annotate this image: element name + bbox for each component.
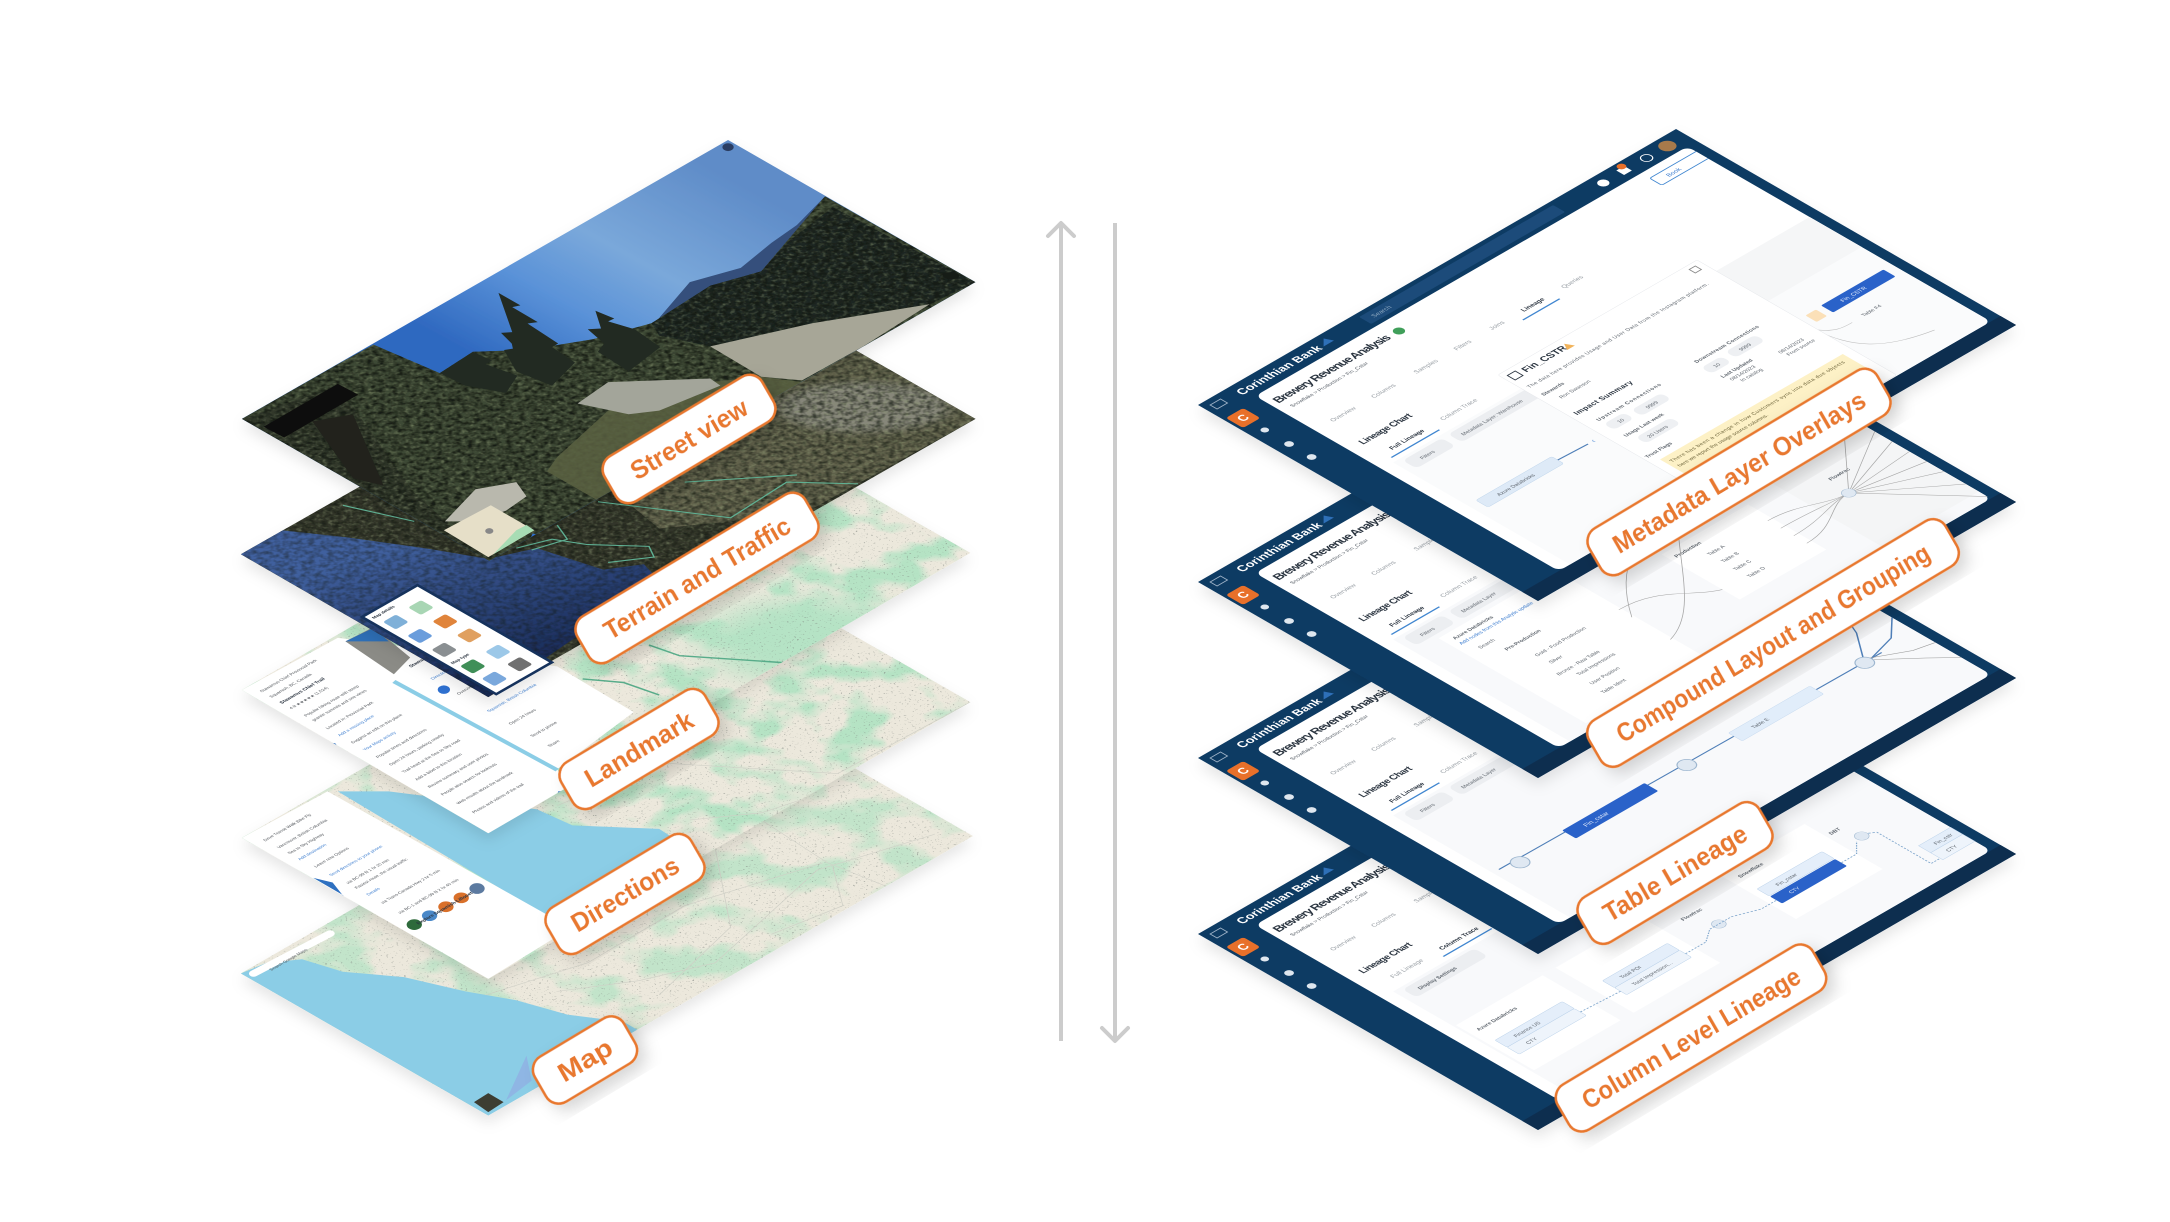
metadata popup card: There has been a change in how Customers sync into data due objects [1669, 360, 1847, 463]
landmark panel text: Send to phone [529, 721, 559, 738]
right stack: lineage layers [1198, 129, 2016, 1130]
layer: column level lineage: Display Settings [1417, 966, 1459, 991]
landmark panel text: People also search for lookouts [439, 762, 499, 796]
layer: map [241, 768, 973, 1123]
landmark panel text: Review summary and user photos [426, 752, 490, 789]
landmark panel text: Squamish, BC, Canada [268, 672, 313, 698]
directions panel text: via BC-1 and BC-99 N 2 hr 40 min [397, 878, 460, 914]
layer: compound layout and grouping: Gold - Food Production [1534, 626, 1588, 658]
layer: column level lineage: Fin_cstar [1775, 873, 1800, 887]
map layers card: Map type [449, 652, 471, 665]
metadata popup card: 08/14/2023 [1777, 338, 1806, 355]
layer: table lineage: Columns [1370, 736, 1399, 752]
label: compound layout and grouping: Compound Layout and Grouping [1611, 537, 1935, 749]
layer: metadata layer overlays: Search [1370, 305, 1394, 319]
directions panel text: Sea to Sky Highway [286, 832, 326, 855]
layer: table lineage: C [1233, 765, 1253, 777]
layer: compound layout and grouping: Table D [1746, 566, 1768, 579]
layer: compound layout and grouping [1198, 421, 2016, 786]
metadata popup card: The data here provides Usage and User Data from the Instagram platform. [1526, 282, 1711, 389]
layer: metadata layer overlays: Corinthian Bank [1233, 343, 1326, 397]
directions panel text: Fastest route, the usual traffic [353, 857, 410, 890]
layer: metadata layer overlays: Snowflake > Production > Fin_Cstar [1289, 361, 1371, 408]
metadata popup card: Upstream Connections [1595, 383, 1663, 422]
layer: compound layout and grouping: User Position [1589, 666, 1622, 686]
layer: compound layout and grouping: Table C [1732, 559, 1754, 572]
metadata popup card [1498, 260, 1897, 490]
landmark panel text: Squamish, British Columbia [486, 683, 538, 713]
directions panel text: Add destination [297, 843, 328, 861]
label: terrain and traffic [570, 487, 824, 669]
layer: table lineage: Lineage Chart [1356, 765, 1416, 799]
landmark panel text: Open 24 hours, parking nearby [388, 733, 446, 766]
layer: compound layout and grouping: Corinthian Bank [1233, 520, 1326, 574]
layer: column level lineage: Azure Databricks [1475, 1007, 1520, 1032]
layer: compound layout and grouping: Table Ident [1600, 678, 1629, 695]
landmark panel text: Stawamus Chief [408, 646, 447, 669]
layer: metadata layer overlays: Samples [1412, 358, 1441, 375]
layer: compound layout and grouping: Full Lineage [1388, 605, 1427, 628]
directions panel text: Send directions to your phone [328, 844, 384, 877]
layer: table lineage: Corinthian Bank [1233, 696, 1326, 750]
landmark panel text: Open 24 hours [507, 708, 538, 725]
metadata popup card: Trust Flags [1644, 442, 1675, 459]
layer: street view [242, 140, 976, 563]
layer: column level lineage: CTY [1945, 844, 1960, 853]
arrow: upward [1048, 223, 1074, 1041]
metadata popup card: Usage Last week [1623, 412, 1667, 438]
layer: compound layout and grouping: Add nodes from this Analytic update [1458, 601, 1536, 646]
layer: compound layout and grouping: Column Trace [1439, 575, 1480, 599]
layer: metadata layer overlays: Fin_CSTR [1840, 286, 1870, 303]
landmark panel text: Overview Reviews About [455, 668, 503, 695]
metadata popup card: 20 Users [1646, 425, 1671, 439]
landmark panel text: Directions Save Nearby [429, 654, 475, 681]
layer: compound layout and grouping: Lineage Chart [1356, 589, 1416, 623]
layer: compound layout and grouping: Azure Databricks [1452, 615, 1496, 641]
layer: column level lineage: Overview [1329, 935, 1359, 952]
label: map [527, 1011, 643, 1109]
layer: table lineage: Fin_cstar [1582, 811, 1612, 828]
layer: landmark [242, 488, 970, 840]
layer: metadata layer overlays: Metadata Layer: Warehouse [1460, 399, 1525, 437]
layer: metadata layer overlays [1198, 129, 2016, 601]
metadata popup card: 9999 [1645, 401, 1661, 410]
left stack: map layers [240, 140, 976, 1123]
layer: column level lineage: CTY [1788, 886, 1803, 895]
layer: column level lineage: Brewery Revenue Analysis [1269, 861, 1395, 934]
layer: compound layout and grouping: Pre-Production [1504, 629, 1544, 652]
layer: column level lineage: Total Impression... [1631, 961, 1675, 987]
layer: metadata layer overlays: Full Lineage [1388, 428, 1427, 451]
label: street view [597, 369, 781, 509]
layer: terrain and traffic [240, 350, 976, 705]
layer: compound layout and grouping: Table A [1706, 545, 1727, 557]
layer: compound layout and grouping: Silver [1548, 655, 1565, 665]
metadata popup card: In catalog [1739, 368, 1765, 383]
metadata popup card: Impact Summary [1571, 379, 1636, 416]
label: directions: Directions [566, 850, 684, 938]
layer: metadata layer overlays: ‹ [1588, 438, 1598, 443]
layer: table lineage: Table E [1750, 717, 1772, 730]
metadata popup card: 08/14/2023 [1729, 365, 1758, 382]
layer: column level lineage: Fin_cstr [1933, 833, 1955, 846]
metadata popup card: 9999 [1738, 343, 1754, 352]
layer: table lineage: Column Trace [1439, 751, 1480, 775]
layer: metadata layer overlays: Overview [1329, 406, 1359, 423]
directions panel text: Vancouver, British Columbia [276, 818, 329, 849]
layer: compound layout and grouping: Overview [1329, 583, 1359, 600]
landmark panel text: Located in: Provincial Park [324, 701, 375, 730]
layer: metadata layer overlays: Table F4 [1860, 304, 1884, 318]
directions panel text [262, 803, 480, 928]
layer: metadata layer overlays: C [1233, 412, 1253, 424]
map layers card: Map details [371, 605, 397, 619]
layer: column level lineage: Full Lineage [1389, 958, 1426, 979]
layer: column level lineage: Lineage Chart [1356, 941, 1416, 975]
layer: metadata layer overlays: Column Trace [1439, 398, 1480, 422]
label: street view: Street view [625, 392, 754, 486]
landmark panel text: Add a missing place [336, 714, 376, 737]
landmark panel text: Add a label to this location [413, 752, 464, 781]
layer: column level lineage: Flowtrac [1680, 908, 1705, 922]
directions panel text: via BC-99 N 1 hr 20 min [345, 858, 391, 885]
metadata popup card: Last Updated [1720, 359, 1755, 379]
layer: metadata layer overlays: Joins [1488, 320, 1508, 331]
landmark panel text: Suggest an edit on this place [349, 713, 404, 744]
label: directions [540, 828, 710, 960]
directions panel text: via Trans-Canada Hwy 2 hr 5 min [379, 869, 442, 904]
layer: metadata layer overlays: Columns [1370, 383, 1399, 399]
landmark panel text: Stawamus Chief Provincial Park [258, 658, 319, 693]
metadata popup card: Ron Swanson [1558, 380, 1593, 400]
layer: metadata layer overlays: Lineage Chart [1356, 412, 1416, 446]
layer: column level lineage: Total POI [1619, 965, 1644, 980]
layer: directions [242, 628, 970, 986]
layer: metadata layer overlays: Brewery Revenue Analysis [1269, 332, 1395, 405]
label: table lineage [1572, 797, 1778, 949]
label: metadata layer overlays: Metadata Layer Overlays [1607, 384, 1871, 560]
layer: compound layout and grouping: C [1233, 589, 1253, 601]
layer: compound layout and grouping: Filters [1419, 627, 1437, 637]
label: terrain and traffic: Terrain and Traffic [598, 510, 796, 646]
landmark panel text [258, 608, 619, 815]
layer: column level lineage: DBT [1828, 827, 1843, 836]
layer: column level lineage: Samples [1412, 887, 1441, 904]
layer: metadata layer overlays: Azure Databricks [1496, 473, 1537, 497]
layer: metadata layer overlays: Filters [1419, 450, 1437, 460]
layer: table lineage: Metadata Layer [1460, 768, 1499, 790]
landmark panel text: Web results about the landmark [455, 771, 515, 805]
layer: table lineage [1198, 605, 2016, 962]
metadata popup card: 10 [1712, 363, 1723, 369]
landmark panel text: Your Maps activity [362, 730, 398, 751]
label: column level lineage: Column Level Lineage [1576, 961, 1806, 1115]
metadata popup card: Downstream Connections [1693, 325, 1761, 364]
layer: column level lineage: Metadata [1500, 898, 1531, 916]
metadata popup card: From source [1786, 339, 1817, 357]
layer: metadata layer overlays: Queries [1560, 274, 1586, 290]
metadata popup card: Stewards [1540, 382, 1567, 397]
landmark panel text: 4.8 ★★★★★ (1,524) [288, 686, 330, 710]
directions panel text: Leave now Options [313, 846, 351, 868]
layer: compound layout and grouping: Search [1477, 638, 1497, 650]
label: table lineage: Table Lineage [1598, 818, 1752, 928]
landmark panel text: Trail head at the Sea to Sky road [400, 738, 462, 774]
layer: compound layout and grouping: Bronze - Raw Table [1556, 650, 1602, 677]
directions panel text: Explore Squamish-Lillooet [415, 891, 475, 926]
layer: compound layout and grouping: Samples [1412, 535, 1441, 552]
layer: column level lineage: Corinthian Bank [1233, 872, 1326, 926]
layer: table lineage: Filters [1419, 803, 1437, 813]
map layers card [362, 585, 552, 694]
layer: compound layout and grouping: Production [1673, 541, 1704, 559]
landmark panel text: Stawamus Chief Trail [278, 677, 328, 705]
metadata popup card: 10 [1616, 418, 1627, 424]
landmark panel text: Popular hiking route with steep [303, 684, 361, 717]
layer: metadata layer overlays: Book [1665, 167, 1684, 178]
layer: table lineage: Full Lineage [1388, 781, 1427, 804]
layer: table lineage: Overview [1329, 759, 1359, 776]
label: landmark: Landmark [579, 704, 699, 793]
layer: column level lineage: Snowflake [1737, 862, 1766, 879]
layer: column level lineage: Column Trace [1438, 926, 1481, 951]
layer: compound layout and grouping: Table B [1720, 551, 1742, 564]
map search text: Search Google Maps [268, 948, 309, 972]
landmark panel text: Share [546, 739, 561, 748]
metadata popup card: here we report the usage source columns. [1677, 413, 1771, 468]
layer: column level lineage: Columns [1370, 912, 1399, 928]
label: map: Map [552, 1032, 618, 1088]
layer: compound layout and grouping: Metadata Layer [1460, 592, 1499, 614]
layer: table lineage: Snowflake > Production > Fin_Cstar [1289, 714, 1371, 761]
layer: table lineage: Brewery Revenue Analysis [1269, 685, 1395, 758]
label: landmark [554, 683, 724, 815]
layer: table lineage: Samples [1412, 711, 1441, 728]
layer: column level lineage: C [1233, 941, 1253, 953]
landmark panel text: Photos and videos of the trail [471, 783, 525, 814]
layer: compound layout and grouping: Flowtrac [1828, 467, 1852, 482]
layer: compound layout and grouping: Total Impressions [1576, 652, 1618, 677]
metadata popup card: Fin_CSTR [1519, 344, 1571, 374]
directions panel text: Drive Transit Walk Bike Fly [262, 813, 313, 842]
directions panel text: Details [365, 887, 382, 896]
arrow: downward [1102, 223, 1128, 1041]
layer: compound layout and grouping: Brewery Revenue Analysis [1269, 509, 1395, 582]
layer: compound layout and grouping: Snowflake > Production > Fin_Cstar [1289, 538, 1371, 585]
layer: column level lineage: Snowflake > Production > Fin_Cstar [1289, 890, 1371, 937]
landmark panel text: granite summits and sea views [310, 688, 369, 722]
layer: metadata layer overlays: Filters [1452, 339, 1474, 352]
layer: metadata layer overlays: Lineage [1520, 297, 1547, 313]
layer: compound layout and grouping: Columns [1370, 560, 1399, 576]
landmark panel text: Popular times and directions [375, 728, 429, 759]
layer: column level lineage: Finance US [1513, 1021, 1543, 1038]
layer: column level lineage: CTY [1525, 1037, 1540, 1045]
layer: column level lineage [1198, 766, 2016, 1138]
